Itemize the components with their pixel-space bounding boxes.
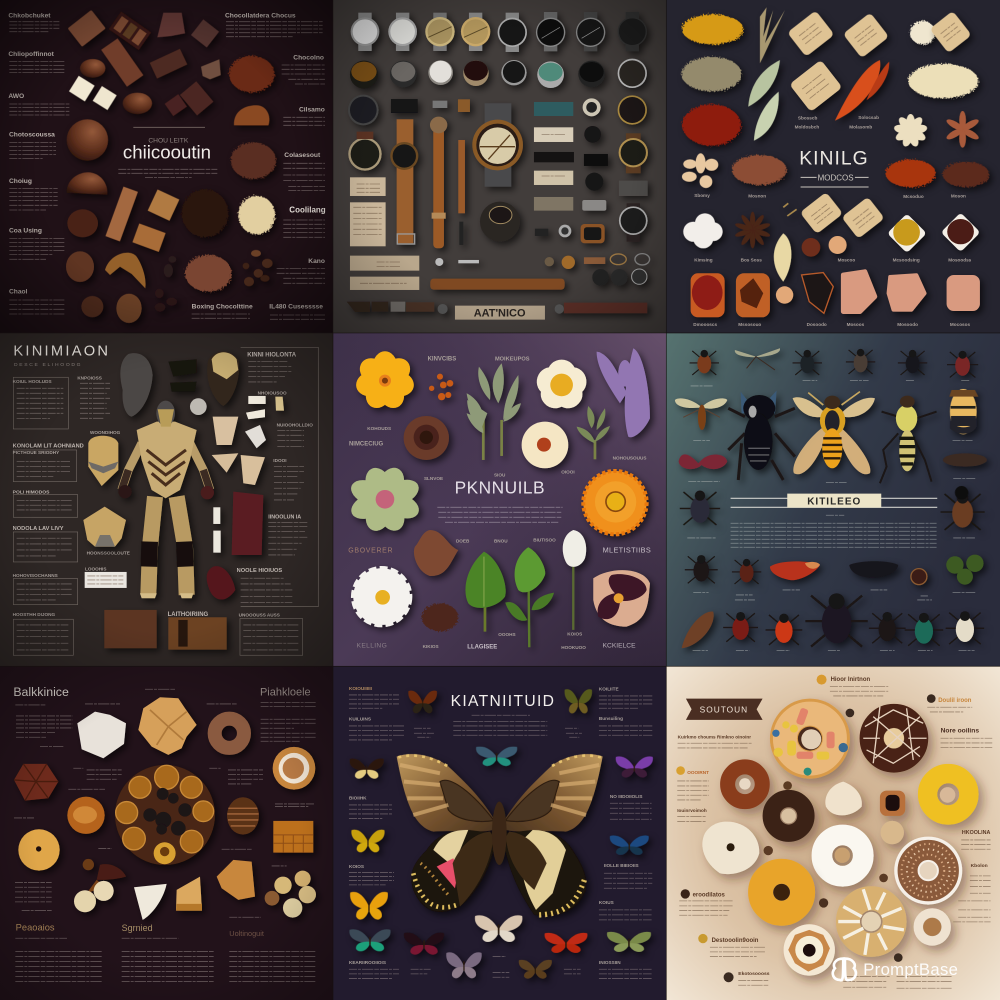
butterfly text blocks: INIOSSIIN — [599, 960, 621, 965]
spices background — [667, 0, 1000, 333]
armour left spec boxes: HOOSTHH DIJONG — [13, 612, 55, 617]
flower labels — [348, 356, 651, 651]
flower labels: BNOU — [494, 538, 508, 543]
small insects top row — [690, 348, 978, 377]
pastry: folded star — [138, 697, 197, 755]
butterfly text blocks: KOIOS — [349, 864, 364, 869]
chocolate left text column — [8, 12, 69, 314]
donut: cream striped — [838, 889, 904, 955]
chocolate left text column: Coa Using — [9, 228, 42, 235]
chocolate left text column: Choiug — [9, 178, 32, 185]
chocolate right text column: Cilsamo — [299, 106, 325, 113]
butterfly text blocks: Bunsuiling — [599, 716, 623, 721]
watches background — [333, 0, 666, 333]
armour right notes: IINOOLUN IA — [268, 514, 301, 520]
armour left spec boxes — [13, 376, 130, 655]
donuts ribbon title: SOUTOUN — [700, 705, 748, 715]
cork-like capsules — [787, 10, 972, 239]
pastry: cream cake — [273, 747, 315, 790]
baking text blocks — [14, 689, 316, 982]
armour background — [0, 333, 333, 666]
flower labels: OIOOI — [561, 470, 575, 475]
flower labels: SIOU — [494, 472, 506, 477]
armour left spec boxes: HOHOVISOCHANNS — [13, 573, 58, 578]
butterfly text blocks: KOILIITE — [599, 687, 619, 692]
pastry: waffle block — [273, 821, 313, 853]
spice labels: Kimsing — [694, 257, 713, 262]
armour left spec boxes: WOONDIHOG — [90, 430, 121, 435]
pastry: meringue star — [77, 712, 126, 758]
spice labels: Mosoodss — [948, 257, 972, 262]
insect captions — [687, 381, 975, 651]
spice labels: Mcsoduo — [903, 194, 924, 199]
panel: chocolate — [0, 0, 333, 333]
butterfly text blocks: BIOIIHK — [349, 796, 367, 801]
chocolate right text column: Boxing Chocolttine — [192, 304, 253, 311]
white flower with yellow centre — [533, 360, 590, 414]
panel: spices — [667, 0, 1000, 333]
spice labels: Moldosbch — [795, 124, 819, 129]
flower labels: KIKIOS — [423, 644, 439, 649]
armour left spec boxes: HOONSSOOLOUTE — [87, 551, 130, 556]
spice labels: Sbosscb — [798, 115, 817, 120]
panel: donuts — [667, 667, 1000, 1000]
flower labels: KOIOS — [567, 631, 582, 636]
spice labels: Moscoo — [838, 257, 855, 262]
small green sprig — [577, 406, 610, 459]
spice labels: Moson — [951, 193, 966, 198]
spice labels: Mssosouo — [738, 322, 761, 327]
chocolate pieces — [66, 10, 276, 323]
pastry: glazed ring — [215, 719, 244, 748]
chocolate right text column: Chocolno — [293, 54, 324, 61]
donut text notes: OOOIRNT — [687, 770, 709, 775]
herb sprigs and leaves — [748, 7, 889, 282]
honey bee — [793, 392, 875, 474]
watch spec cards — [350, 102, 574, 290]
armour right notes: KINNI HIOLONTA — [247, 353, 297, 359]
insects title banner — [731, 494, 937, 547]
panel: watches — [333, 0, 666, 333]
spice powders — [682, 14, 989, 187]
donut text notes: Kuirkmo choums Rimkno oinoinr — [678, 735, 751, 740]
chocolate background — [0, 0, 333, 333]
watches top row — [351, 12, 647, 52]
panel: butterflies — [333, 667, 666, 1000]
pastry: hazelnuts and cream balls — [74, 859, 126, 912]
armour right notes: NOOLE HIOIUOS — [237, 568, 282, 574]
brown tuft — [422, 603, 458, 631]
baking headings: Peaoaios — [16, 923, 55, 933]
baking headings: Sgrnied — [122, 923, 153, 933]
herb stems — [467, 363, 521, 460]
butterflies background — [333, 667, 666, 1000]
watches title plate: AAT'NICO — [474, 308, 526, 320]
flower labels: KELLING — [357, 643, 387, 650]
white daisy — [352, 567, 411, 626]
pastry: caramel bun — [67, 797, 105, 834]
donut text notes: Nore ooilins — [941, 728, 979, 735]
donut text notes: Iouinrvoimoh — [677, 808, 707, 813]
lavender — [597, 348, 650, 437]
flower labels: HOOKUOO — [561, 645, 586, 650]
butterflies title — [451, 693, 554, 735]
pastry: white wedge — [134, 884, 167, 920]
donut text notes: Doulil iroon — [938, 698, 972, 704]
right column bee and moth — [680, 389, 987, 530]
armour title: DESCE ELIHOODG — [14, 362, 82, 368]
PromptBase watermark: PromptBase — [863, 960, 958, 979]
chocolate right text column: Coolilang — [289, 206, 326, 215]
spices title: KINILG — [799, 149, 869, 170]
donut text notes: HKOOLINA — [962, 830, 990, 836]
flower labels: DOEB — [456, 538, 470, 543]
armour title: KINIMIAON — [13, 344, 109, 360]
armour vignette — [0, 333, 333, 666]
armour right notes: IDOOI — [273, 458, 287, 463]
flower labels: LLAGISEE — [467, 645, 497, 651]
giant butterfly — [397, 754, 603, 916]
flower labels: KINVCIBS — [428, 357, 456, 363]
armour left spec boxes: LOOOHIS — [85, 567, 106, 572]
donut: white — [822, 835, 863, 876]
spice labels: Sbomy — [694, 193, 710, 198]
chocolate left text column: AWO — [8, 93, 24, 100]
flower labels: NOHOUSOUUS — [613, 455, 646, 460]
panel: armour — [0, 333, 333, 666]
butterfly text blocks: KOIUS — [599, 900, 614, 905]
flower labels: KOHOUDS — [367, 426, 391, 431]
pastry: chocolate hexagon — [14, 764, 58, 801]
chocolate vignette — [0, 0, 333, 333]
dark pansy — [593, 570, 650, 627]
cup and round biscuit — [880, 791, 905, 844]
chocolate left text column: Chaol — [9, 289, 28, 296]
armour left spec boxes: KONOLAM LIT AOHNIAND — [13, 443, 84, 449]
chocolate title: CHOU LEITK — [148, 138, 189, 145]
PromptBase watermark — [833, 959, 958, 980]
donuts background — [667, 667, 1000, 1000]
baking vignette — [0, 667, 333, 1000]
chocolate title — [118, 127, 217, 178]
flowers title: PKNNUILB — [455, 478, 545, 498]
winged fly left — [675, 398, 727, 469]
armour suit figure — [118, 401, 214, 598]
butterfly text blocks: KUILUINS — [349, 717, 371, 722]
flower labels: BIUTISOO — [533, 538, 556, 543]
spice labels: Bos Soss — [741, 257, 762, 262]
green leaves — [465, 547, 554, 647]
armour helmet and plates — [83, 351, 284, 650]
chocolate left text column: Chotoscoussa — [9, 131, 55, 138]
armour right notes: LAITHOIRIING — [168, 612, 209, 618]
watches vignette — [333, 0, 666, 333]
armour right notes: NHOIOUSOO — [258, 390, 287, 395]
donut: sprinkles — [770, 699, 850, 779]
flowers light overlay — [333, 333, 666, 666]
small butterflies — [349, 689, 653, 979]
baking headings: Uoltinoguit — [229, 929, 264, 938]
baking headings: Balkkinice — [13, 685, 69, 699]
donut: speckled on plate — [894, 837, 962, 905]
chocolate title: chiicooutin — [123, 141, 211, 162]
panel: flowers — [333, 333, 666, 666]
donut: dark chocolate — [771, 781, 806, 833]
spice labels: Dosoodo — [807, 322, 827, 327]
armour right notes — [168, 347, 318, 655]
hero watch — [472, 103, 523, 242]
baking background — [0, 667, 333, 1000]
chocolate right text column: Kano — [308, 258, 325, 265]
black beetle — [728, 391, 795, 480]
cream flower — [522, 422, 568, 468]
spice labels: Molasomb — [849, 124, 872, 129]
pastry: layered slice — [176, 877, 202, 911]
spice dishes and clay pieces — [691, 213, 980, 317]
donut text notes: Ekotosoooss — [738, 971, 770, 977]
spice labels: Mosoodo — [897, 322, 918, 327]
central platter — [115, 765, 215, 865]
armour left spec boxes: KNPOIOSS — [77, 376, 102, 381]
chocolate right text column: Colasesout — [284, 152, 321, 159]
chocolate right text column: Chocollatdera Chocus — [225, 13, 296, 20]
pastry: cream puff — [825, 782, 862, 815]
spices title: MODCOS — [818, 174, 854, 183]
flowers, seeds and star anise — [682, 111, 980, 257]
insects title banner: KITILEEO — [807, 496, 861, 507]
butterflies title: KIATNIITUID — [451, 693, 554, 710]
donut: yellow — [928, 774, 969, 815]
armour left spec boxes: KOIUL HOOLUDS — [13, 379, 52, 384]
flowers title — [437, 478, 563, 522]
white tulip — [563, 530, 586, 630]
spice labels: Mocosos — [950, 322, 970, 327]
spice labels: Solocsab — [858, 115, 879, 120]
flower: yellow — [354, 351, 416, 412]
donut: chocolate drizzle — [863, 707, 927, 763]
donut: caramel iced — [784, 924, 835, 976]
spice labels: Mosoos — [847, 322, 865, 327]
armour left spec boxes: POLI HIMODOS — [13, 490, 50, 496]
green lotus — [347, 464, 423, 535]
armour right notes: NUIOOHOLLDIO — [277, 422, 313, 427]
spice labels: Mosnon — [748, 193, 766, 198]
insects background — [667, 333, 1000, 666]
armour left spec boxes: PICTHOUE SRIODHY — [13, 450, 60, 455]
butterfly text blocks: IIOLLE BIEIOIIS — [604, 863, 639, 868]
baking headings: Piahkloele — [260, 686, 311, 698]
spices title — [799, 149, 869, 187]
brown bud — [414, 530, 458, 576]
flowers background — [333, 333, 666, 666]
chocolate right text column — [192, 13, 326, 319]
lower insects — [682, 555, 984, 648]
donut text notes: Kbolon — [971, 863, 988, 869]
orange sprig — [429, 374, 453, 400]
spice labels: Dmoooscs — [693, 322, 717, 327]
donut text notes: eroodilatos — [693, 893, 726, 899]
armour right notes: UNOOOUSS AUSS — [239, 613, 280, 618]
flower labels: NIMCECIUG — [349, 442, 384, 448]
donut text notes — [676, 675, 992, 988]
pastry: butter cookie — [18, 829, 60, 871]
pastry: small tartlets — [265, 871, 316, 918]
donut: powdered — [702, 822, 759, 874]
brown rose — [404, 416, 449, 460]
donuts ribbon title — [686, 699, 763, 720]
pastry: striped ball — [227, 797, 259, 835]
donut text notes: Hioor lnirtnon — [831, 677, 870, 683]
flower labels: MOIKEUPOS — [495, 356, 530, 362]
watches second row — [350, 59, 647, 89]
leather straps and small watches — [347, 95, 650, 314]
flower labels: SLNVOE — [424, 476, 443, 481]
orange gerbera — [583, 471, 647, 534]
spice labels — [693, 115, 972, 327]
donut: golden sugar — [761, 871, 803, 913]
capsule printing — [799, 23, 961, 228]
watches title plate — [455, 306, 545, 320]
chocolate right text column: IL480 Cusesssse — [269, 304, 323, 311]
flower labels: OOOHS — [498, 632, 516, 637]
butterfly text blocks: NO IIIDOIIOLIS — [610, 794, 643, 799]
panel: insects — [667, 333, 1000, 666]
flower labels: MLETISTIIBS — [603, 546, 651, 555]
spice labels: Mcsoodsing — [893, 257, 920, 262]
donut: small coconut — [918, 913, 946, 941]
baking headings — [13, 685, 311, 938]
butterfly text blocks: KOIOUIIIIII — [349, 686, 372, 691]
flower labels: KCKIELCE — [603, 643, 636, 650]
butterfly text blocks — [349, 686, 652, 979]
chocolate left text column: Chkobchuket — [8, 12, 51, 19]
donut text notes: Destooolin9ooin — [712, 938, 759, 944]
panel: baking — [0, 667, 333, 1000]
chocolate left text column: Chliopoffinnot — [8, 51, 55, 58]
armour left spec boxes: NODOLA LAV LIVY — [13, 526, 64, 532]
armour title — [13, 344, 109, 368]
striped wasp — [880, 396, 937, 483]
butterfly text blocks: KEARIIROOIIOIS — [349, 960, 386, 965]
pastry: crumbly biscuit — [217, 860, 255, 900]
flower labels: GBOVERER — [348, 548, 393, 555]
donut: glazed brown — [728, 767, 762, 802]
